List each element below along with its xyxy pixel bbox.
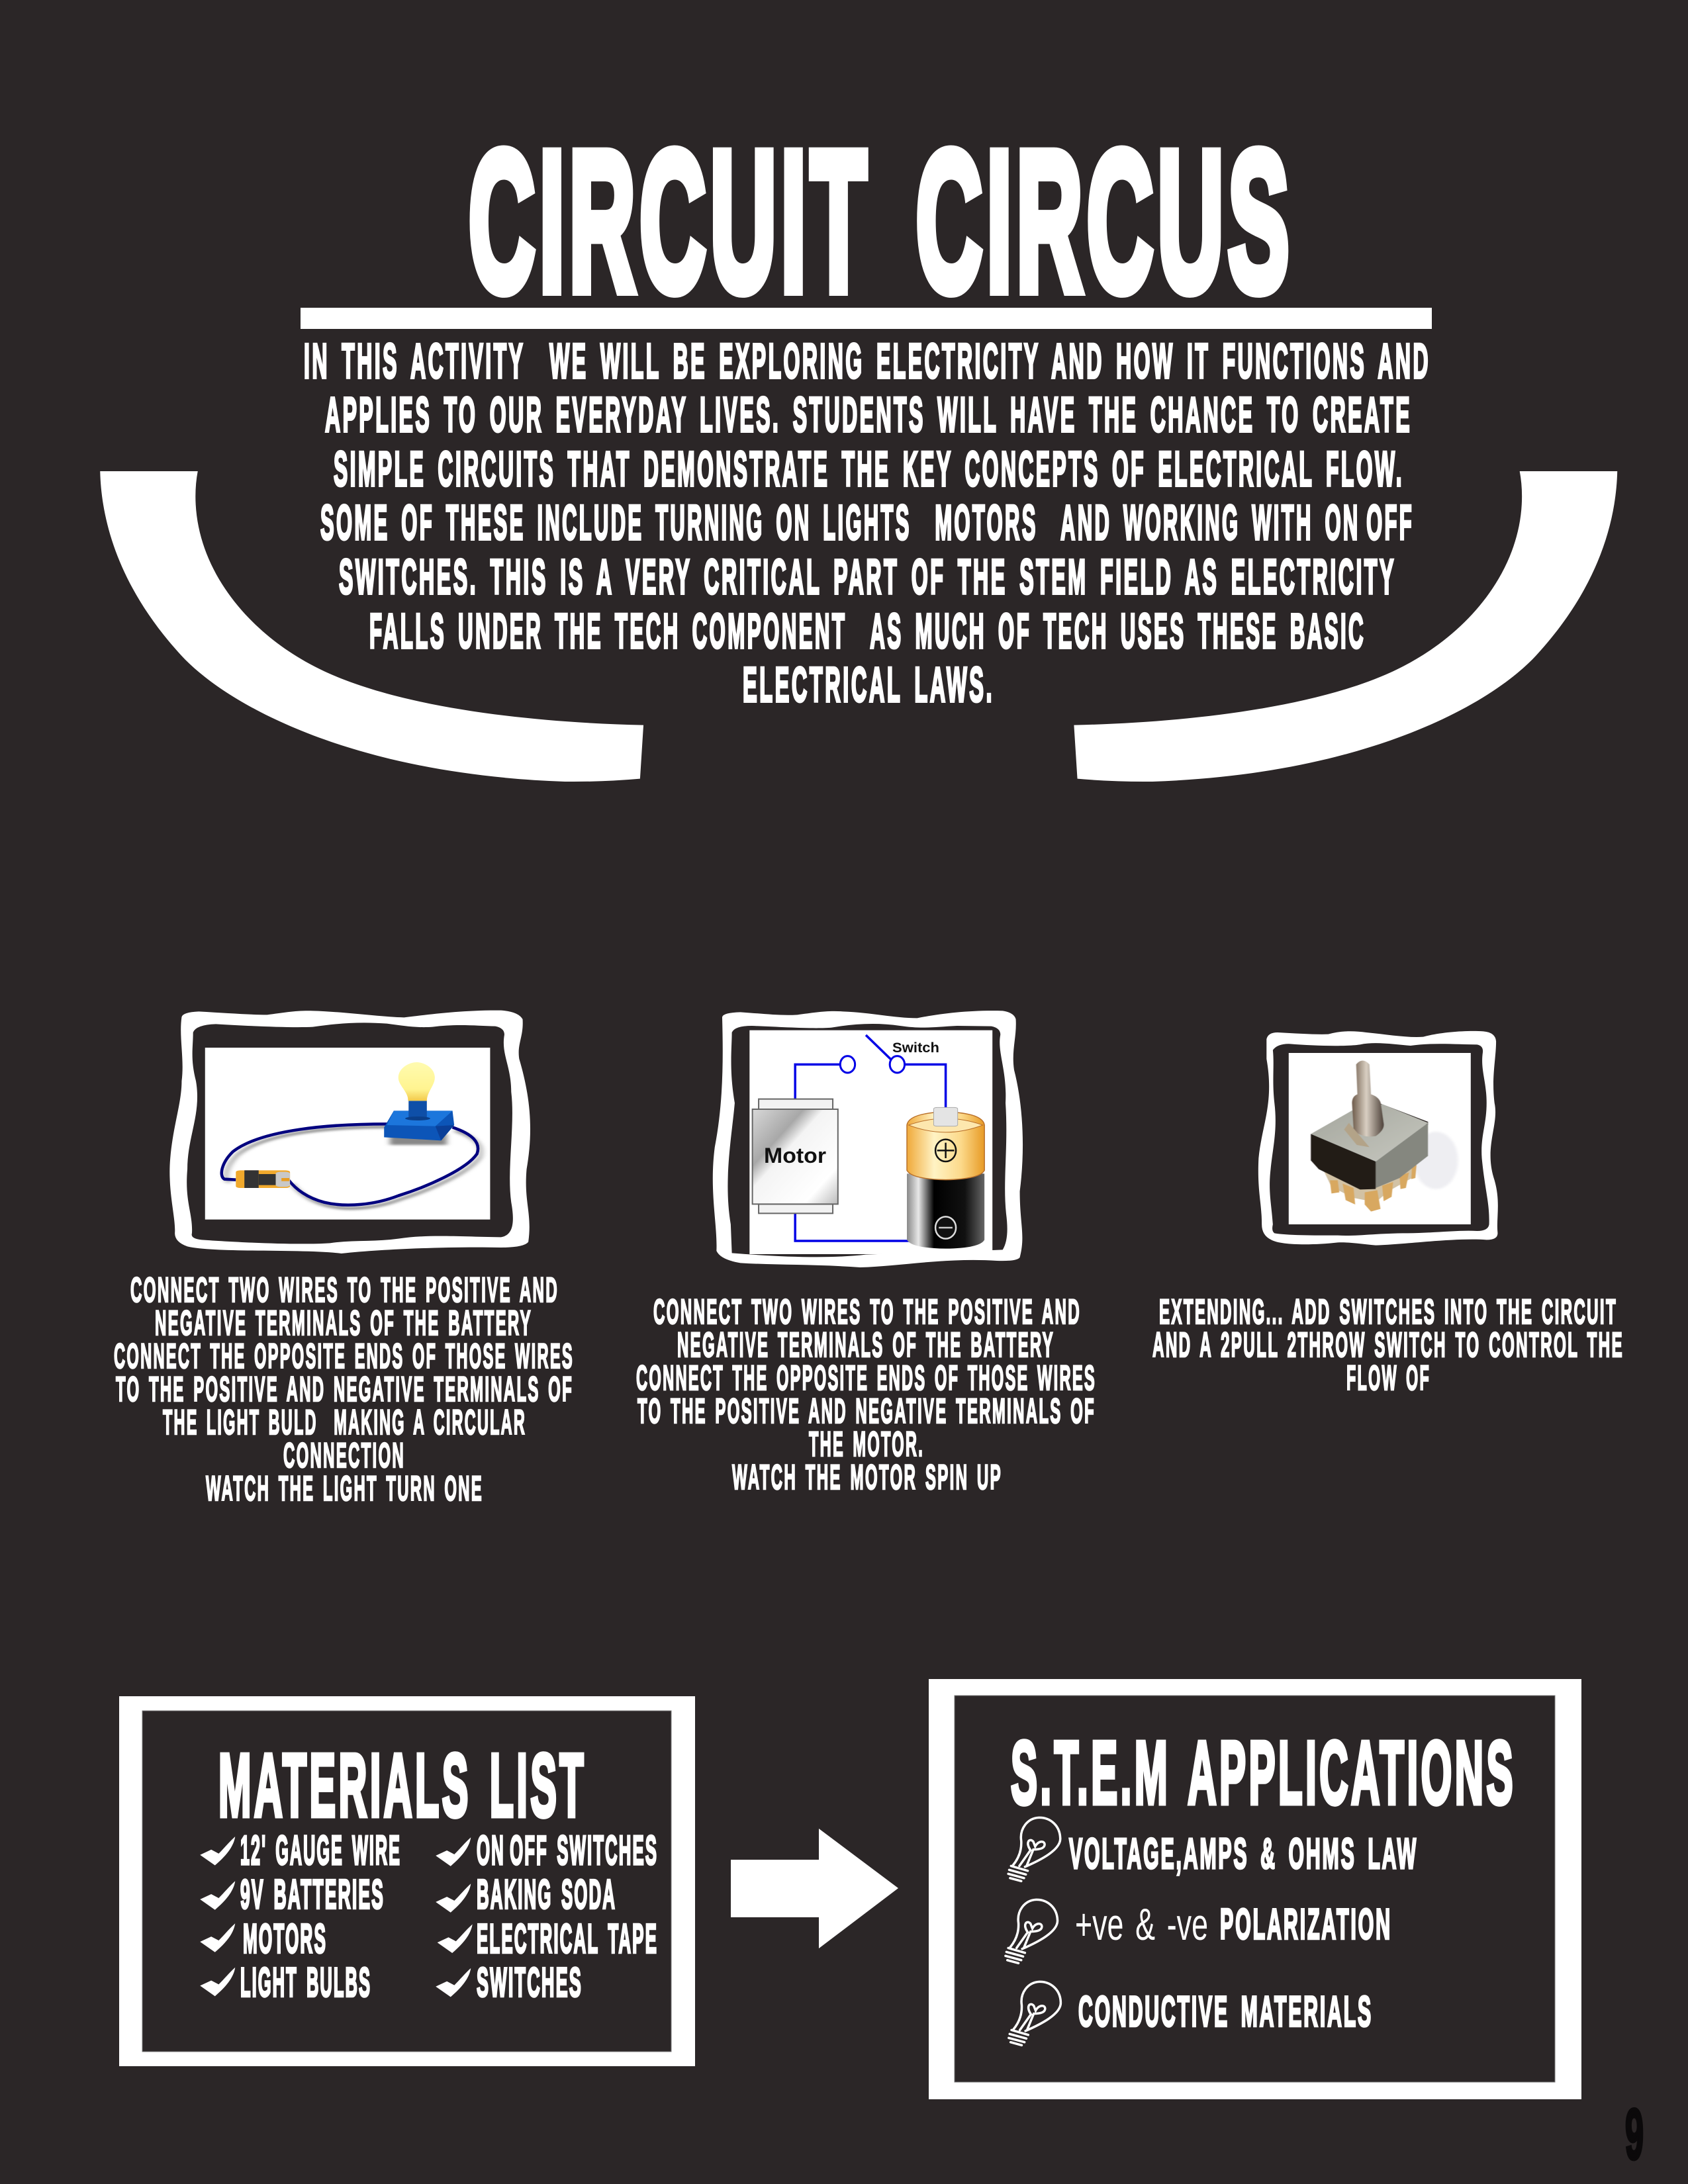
materials items: SWITCHES [477, 1960, 583, 2005]
materials items: BAKING SODA [477, 1872, 616, 1918]
materials checkmarks [200, 1837, 473, 1997]
step 2 text: NEGATIVE TERMINALS OF THE BATTERY [677, 1326, 1055, 1365]
materials items [240, 1828, 658, 2005]
materials items: 12' GAUGE WIRE [240, 1828, 401, 1874]
materials items: LIGHT BULBS [240, 1960, 371, 2005]
infographic page: CONNECT THE OPPOSITE ENDS OF THOSE WIRES [114, 1337, 574, 1376]
materials items: 9V BATTERIES [240, 1872, 385, 1918]
infographic page: CONNECT TWO WIRES TO THE POSITIVE AND [130, 1271, 559, 1310]
panel: light bulb circuit picture [169, 1011, 530, 1253]
step 2 text [636, 1293, 1096, 1497]
panel: stem applications: POLARIZATION [1220, 1899, 1392, 1948]
arrow [731, 1829, 898, 1948]
panel: materials list: ELECTRICAL TAPE [477, 1917, 658, 1962]
step 1 text: CONNECTION [283, 1436, 405, 1475]
right crescent [1074, 471, 1617, 782]
infographic page: TO THE POSITIVE AND NEGATIVE TERMINALS OF [116, 1370, 573, 1409]
panel: stem applications [929, 1679, 1581, 2099]
title rule [301, 308, 1432, 329]
panel: toggle switch picture [1258, 1031, 1498, 1246]
panel: motor circuit picture [713, 1011, 1023, 1267]
step 1 text [114, 1271, 574, 1508]
panel: materials list [119, 1696, 695, 2066]
step 3 text: FLOW OF [1346, 1359, 1430, 1398]
step 2 text: THE MOTOR. [809, 1425, 924, 1464]
panel: materials list: MATERIALS LIST [218, 1735, 586, 1835]
left crescent [100, 471, 643, 782]
step 3 text [1152, 1293, 1624, 1398]
materials items: MOTORS [243, 1917, 327, 1962]
stem item: polarization: +ve & -ve [1075, 1899, 1208, 1950]
intro paragraph [304, 334, 1430, 712]
step 2 text: WATCH THE MOTOR SPIN UP [732, 1458, 1002, 1497]
panel: materials list: ON OFF SWITCHES [477, 1828, 658, 1874]
intro paragraph: ELECTRICAL LAWS. [743, 657, 994, 712]
motor label: Motor [764, 1144, 826, 1167]
switch label: Switch [892, 1040, 939, 1056]
step 1 text: NEGATIVE TERMINALS OF THE BATTERY [155, 1304, 532, 1343]
infographic page: TO THE POSITIVE AND NEGATIVE TERMINALS OF [637, 1392, 1096, 1431]
step 1 text: THE LIGHT BULD MAKING A CIRCULAR [163, 1403, 526, 1442]
step 1 text: WATCH THE LIGHT TURN ONE [206, 1469, 483, 1508]
stem item: polarization [1075, 1899, 1392, 1950]
infographic page: 9 [1625, 2094, 1644, 2174]
infographic page: CONNECT TWO WIRES TO THE POSITIVE AND [653, 1293, 1081, 1332]
infographic page: CONNECT THE OPPOSITE ENDS OF THOSE WIRES [636, 1359, 1096, 1398]
icon: light bulbs [1006, 1817, 1060, 2045]
